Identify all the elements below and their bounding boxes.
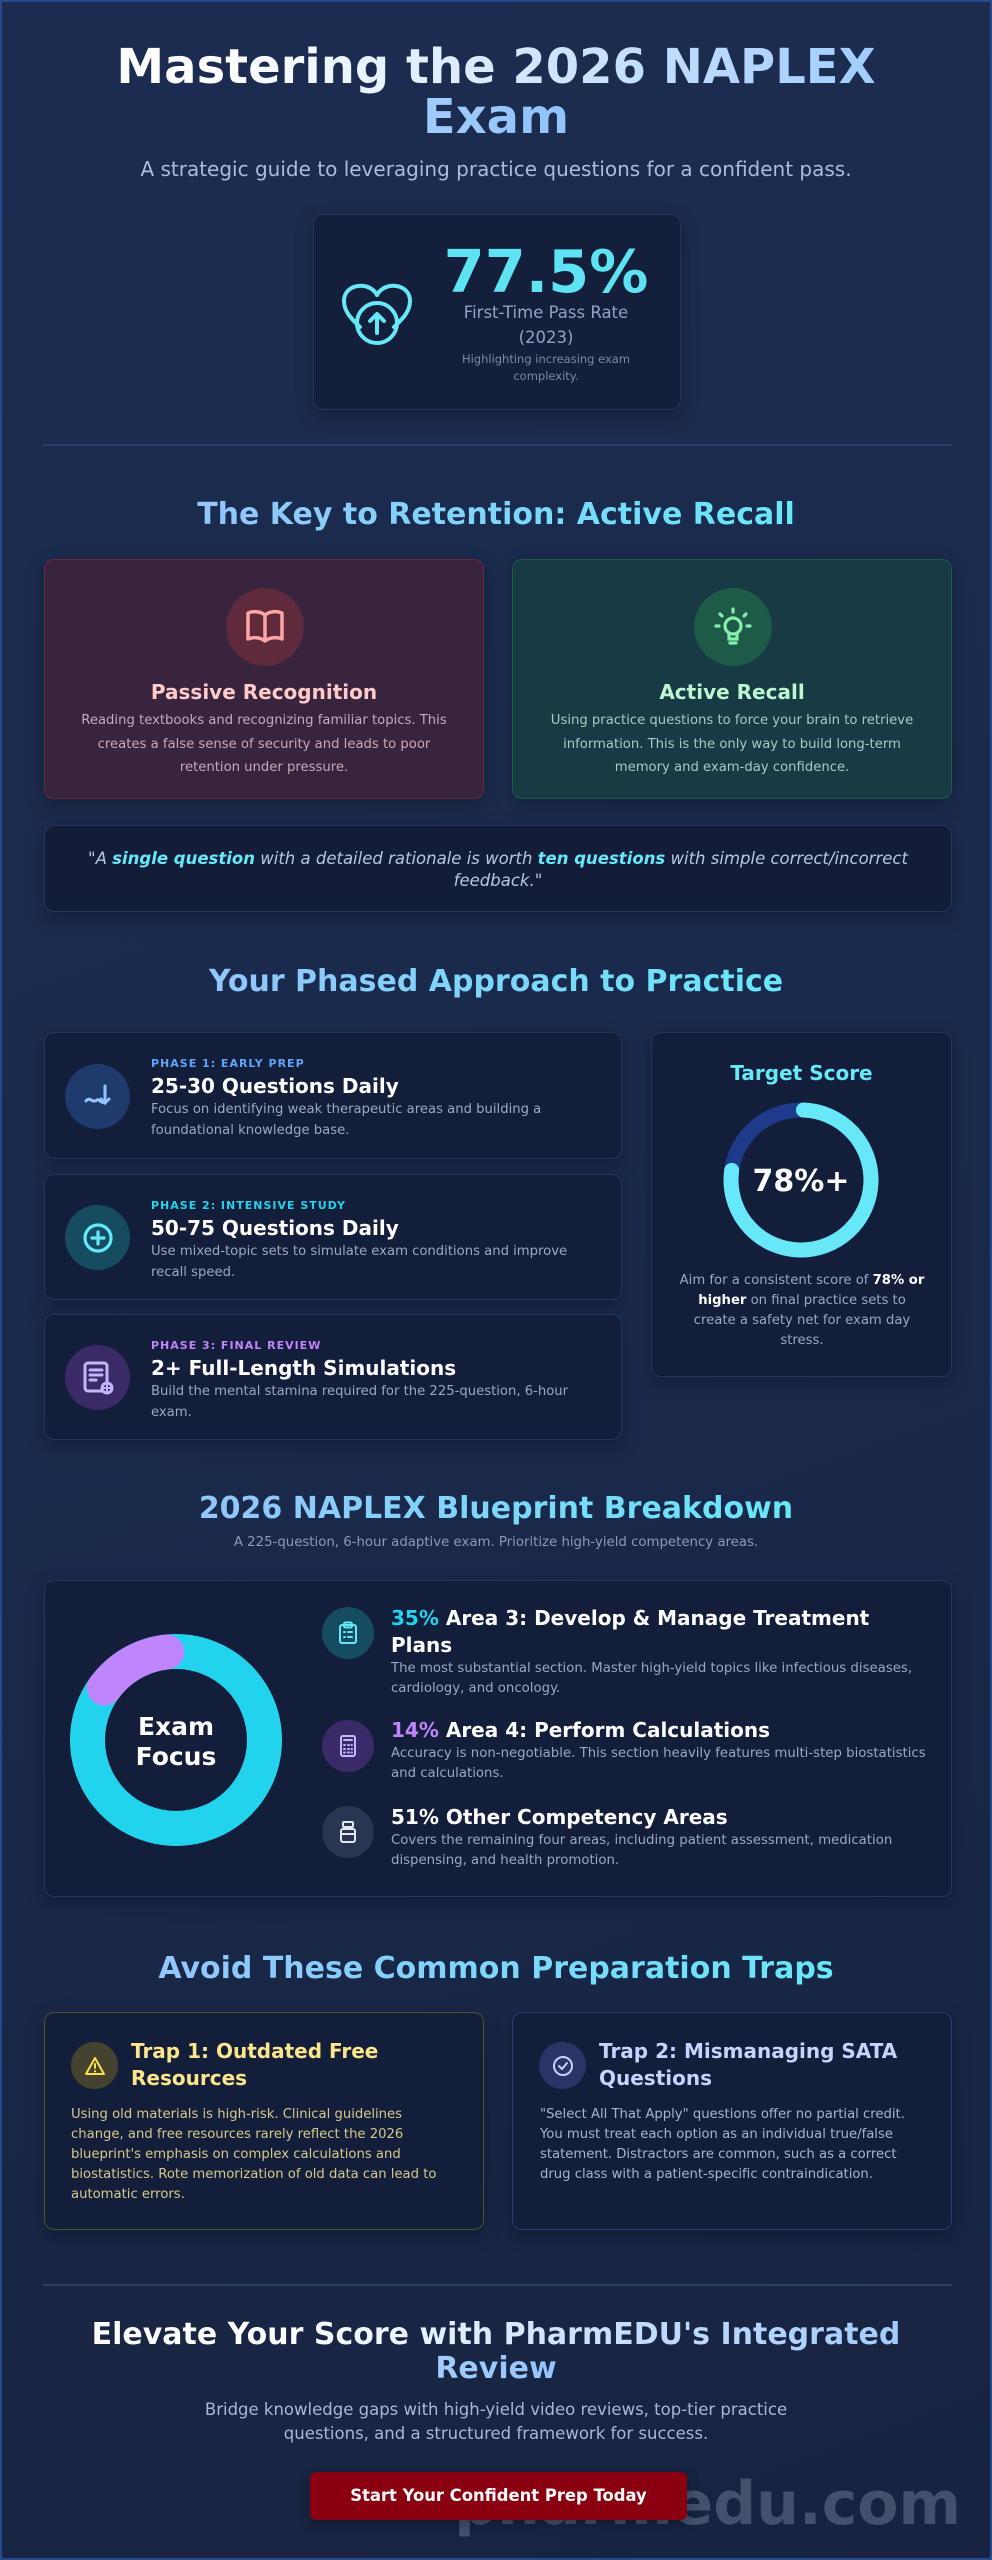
panel: target score bbox=[651, 1032, 952, 1377]
panel: phase 1: Focus on identifying weak therapeutic areas and building a foundational knowledge base. bbox=[151, 1102, 541, 1138]
item: area 3: The most substantial section. Master high-yield topics like infectious diseases, cardiology, and oncology. bbox=[391, 1661, 912, 1696]
panel: phase 2 bbox=[44, 1174, 622, 1300]
heading: blueprint: 2026 NAPLEX Blueprint Breakdown bbox=[199, 1491, 793, 1526]
heading: call to action: Elevate Your Score with PharmEDU's Integrated bbox=[92, 2317, 900, 2352]
panel: target score: Target Score bbox=[730, 1061, 873, 1085]
callout: quote: "A single question with a detailed rationale is worth ten questions with simple correct/incorrect feedback." bbox=[88, 849, 908, 890]
panel: trap 1 bbox=[44, 2012, 484, 2230]
stat value: 77.5% bbox=[444, 237, 648, 306]
panel: active recall bbox=[512, 559, 952, 799]
panel: phase 1: 25-30 Questions Daily bbox=[151, 1074, 399, 1098]
panel: phase 3: Build the mental stamina required for the 225-question, 6-hour exam. bbox=[151, 1384, 568, 1420]
card text: Using practice questions to force your brain to retrieve information. This is the only way to build long-term memory and exam-day confidence. bbox=[551, 713, 913, 775]
panel: phase 1: PHASE 1: EARLY PREP bbox=[151, 1057, 305, 1070]
stat label: First-Time Pass Rate (2023) bbox=[464, 303, 628, 347]
panel: blueprint bbox=[44, 1580, 952, 1897]
panel: passive recognition bbox=[44, 559, 484, 799]
icon: light bulb bbox=[694, 588, 772, 666]
card title: Passive Recognition bbox=[151, 680, 377, 704]
button bbox=[310, 2472, 687, 2520]
icon: phase 3 bbox=[65, 1345, 130, 1410]
chart: target donut: 78%+ bbox=[753, 1164, 849, 1199]
chart: exam focus donut: Exam bbox=[138, 1712, 214, 1741]
panel: trap 1: Using old materials is high-risk. Clinical guidelines change, and free resources rarely reflect the 2026 blueprint's emphasis on complex calculations and biostatistics. Rote memorization of old data can lead to automatic errors. bbox=[71, 2107, 436, 2202]
icon: heart with up arrow bbox=[342, 284, 412, 345]
heading: traps: Avoid These Common Preparation Traps bbox=[158, 1951, 834, 1986]
heading: phased approach: Your Phased Approach to Practice bbox=[209, 964, 783, 999]
icon: phase 1 bbox=[65, 1064, 130, 1129]
panel: phase 3: 2+ Full-Length Simulations bbox=[151, 1356, 456, 1380]
chart: exam focus donut: Focus bbox=[136, 1742, 216, 1771]
heading: call to action: Review bbox=[435, 2351, 557, 2386]
panel: phase 3: PHASE 3: FINAL REVIEW bbox=[151, 1339, 321, 1352]
icon: calculator bbox=[322, 1720, 374, 1772]
item: other areas: 51% Other Competency Areas bbox=[391, 1805, 728, 1829]
item: other areas bbox=[391, 1805, 892, 1868]
heading: active recall: The Key to Retention: Active Recall bbox=[197, 497, 795, 532]
heading: call to action bbox=[92, 2317, 900, 2386]
icon: medication bottle bbox=[322, 1806, 374, 1858]
panel: trap 2 bbox=[512, 2012, 952, 2230]
panel: phase 2: 50-75 Questions Daily bbox=[151, 1216, 399, 1240]
icon: clipboard bbox=[322, 1607, 374, 1659]
stat card: pass rate bbox=[313, 214, 681, 410]
panel: phase 1 bbox=[44, 1032, 622, 1159]
blueprint subtitle: A 225-question, 6-hour adaptive exam. Prioritize high-yield competency areas. bbox=[234, 1535, 758, 1550]
title: Mastering the 2026 NAPLEX bbox=[116, 39, 876, 95]
panel: target score: higher on final practice sets to bbox=[698, 1293, 906, 1308]
panel: trap 2: Trap 2: Mismanaging SATA Questions bbox=[599, 2039, 897, 2090]
button: Start Your Confident Prep Today bbox=[350, 2486, 647, 2505]
icon: phase 2 bbox=[65, 1205, 130, 1270]
cta text: Bridge knowledge gaps with high-yield video reviews, top-tier practice bbox=[205, 2400, 787, 2419]
callout: quote bbox=[44, 825, 952, 912]
cta text: questions, and a structured framework for success. bbox=[284, 2424, 708, 2443]
panel: target score: Aim for a consistent score of 78% or bbox=[680, 1273, 924, 1288]
card title: Active Recall bbox=[659, 680, 805, 704]
card text: Reading textbooks and recognizing familiar topics. This creates a false sense of security and leads to poor retention under pressure. bbox=[81, 713, 447, 775]
item: other areas: Covers the remaining four areas, including patient assessment, medication dispensing, and health promotion. bbox=[391, 1833, 892, 1868]
panel: target score: stress. bbox=[780, 1333, 824, 1348]
panel: trap 2: "Select All That Apply" questions offer no partial credit. You must treat each option as an individual true/false statement. Distractors are common, such as a correct drug class with a patient-specific contraindication. bbox=[540, 2107, 905, 2182]
icon: book bbox=[226, 588, 304, 666]
watermark: pharmedu.com bbox=[454, 2469, 961, 2539]
title bbox=[116, 39, 876, 145]
panel: phase 3 bbox=[44, 1314, 622, 1440]
cta text bbox=[205, 2400, 787, 2443]
item: area 3 bbox=[390, 1606, 912, 1696]
item: area 4: 14% Area 4: Perform Calculations bbox=[391, 1718, 770, 1742]
icon: warning bbox=[71, 2042, 118, 2089]
item: area 4: Accuracy is non-negotiable. This section heavily features multi-step biostatistics and calculations. bbox=[391, 1746, 926, 1781]
icon: check circle bbox=[539, 2042, 586, 2089]
chart: target donut bbox=[724, 1102, 878, 1258]
panel: phase 2: PHASE 2: INTENSIVE STUDY bbox=[151, 1199, 346, 1212]
chart: exam focus donut bbox=[70, 1634, 282, 1846]
item: area 3: 35% Area 3: Develop & Manage Treatment Plans bbox=[391, 1606, 869, 1657]
panel: trap 1: Trap 1: Outdated Free Resources bbox=[131, 2039, 378, 2090]
panel: phase 2: Use mixed-topic sets to simulate exam conditions and improve recall speed. bbox=[151, 1244, 567, 1280]
title: Exam bbox=[423, 89, 569, 145]
subtitle: A strategic guide to leveraging practice questions for a confident pass. bbox=[140, 157, 852, 181]
stat note: Highlighting increasing exam complexity. bbox=[462, 352, 630, 383]
panel: target score: create a safety net for exam day bbox=[694, 1313, 910, 1328]
item: area 4 bbox=[391, 1718, 926, 1781]
